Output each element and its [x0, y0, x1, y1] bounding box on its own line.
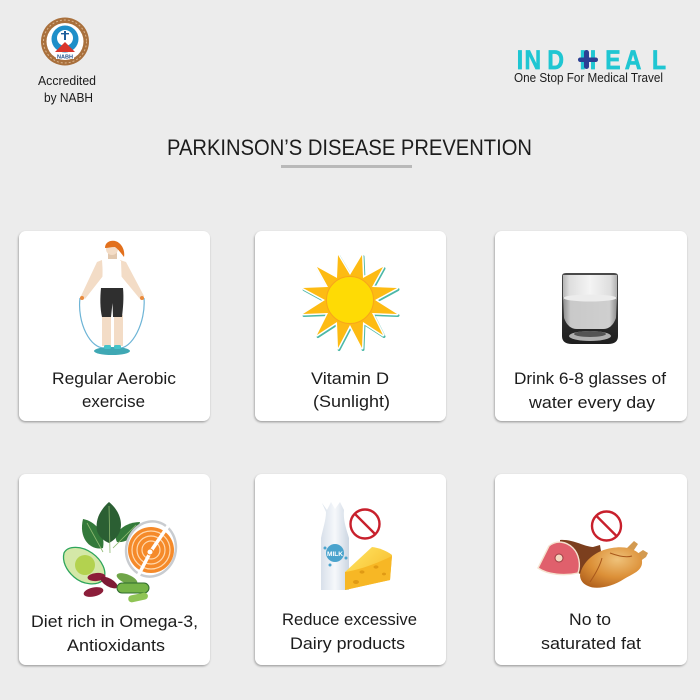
icon: no sign — [350, 510, 380, 538]
Indheal logo — [514, 45, 666, 85]
title: PARKINSON’S DISEASE PREVENTION — [167, 135, 532, 160]
icon: milk bottle: MILK — [327, 551, 343, 558]
icon: sun — [303, 255, 398, 350]
label — [282, 610, 417, 653]
icon: cheese — [345, 547, 392, 590]
label: Diet rich in Omega-3, — [31, 612, 198, 631]
icon: NABH seal: NABH — [57, 54, 73, 60]
icon: woman jumping rope — [80, 241, 144, 355]
icon: roast chicken — [580, 541, 648, 588]
label: No to — [569, 610, 611, 629]
icon: glass of water — [562, 273, 618, 344]
icon: no sign — [592, 512, 621, 540]
logo wordmark: INDHEAL — [517, 45, 666, 75]
label: Drink 6-8 glasses of — [514, 369, 666, 388]
label — [514, 369, 666, 412]
icon: omega-3 foods — [63, 502, 184, 603]
label: Dairy products — [290, 634, 405, 653]
label: Vitamin D — [311, 369, 389, 388]
label: Regular Aerobic — [52, 369, 177, 388]
icon: milk bottle — [321, 502, 349, 590]
text: accredited by NABH: Accredited — [38, 74, 96, 88]
NABH accreditation badge — [38, 18, 96, 105]
label: saturated fat — [541, 634, 641, 653]
icon: ham — [538, 540, 601, 575]
text: accredited by NABH: by NABH — [44, 91, 93, 105]
label: water every day — [528, 393, 656, 412]
label: Antioxidants — [67, 636, 165, 655]
logo tagline: One Stop For Medical Travel — [514, 71, 663, 85]
panel: dairy — [255, 474, 446, 665]
label: Reduce excessive — [282, 610, 417, 629]
label: (Sunlight) — [313, 392, 390, 411]
panel: aerobic exercise — [19, 231, 210, 421]
label: exercise — [82, 392, 145, 411]
panel: vitamin D — [255, 231, 446, 421]
label — [52, 369, 177, 411]
panel: water — [495, 231, 687, 421]
panel: diet — [19, 474, 210, 665]
text: accredited by NABH — [38, 74, 96, 105]
label — [311, 369, 390, 411]
panel: saturated fat — [495, 474, 687, 665]
label — [541, 610, 641, 653]
label — [31, 612, 198, 655]
